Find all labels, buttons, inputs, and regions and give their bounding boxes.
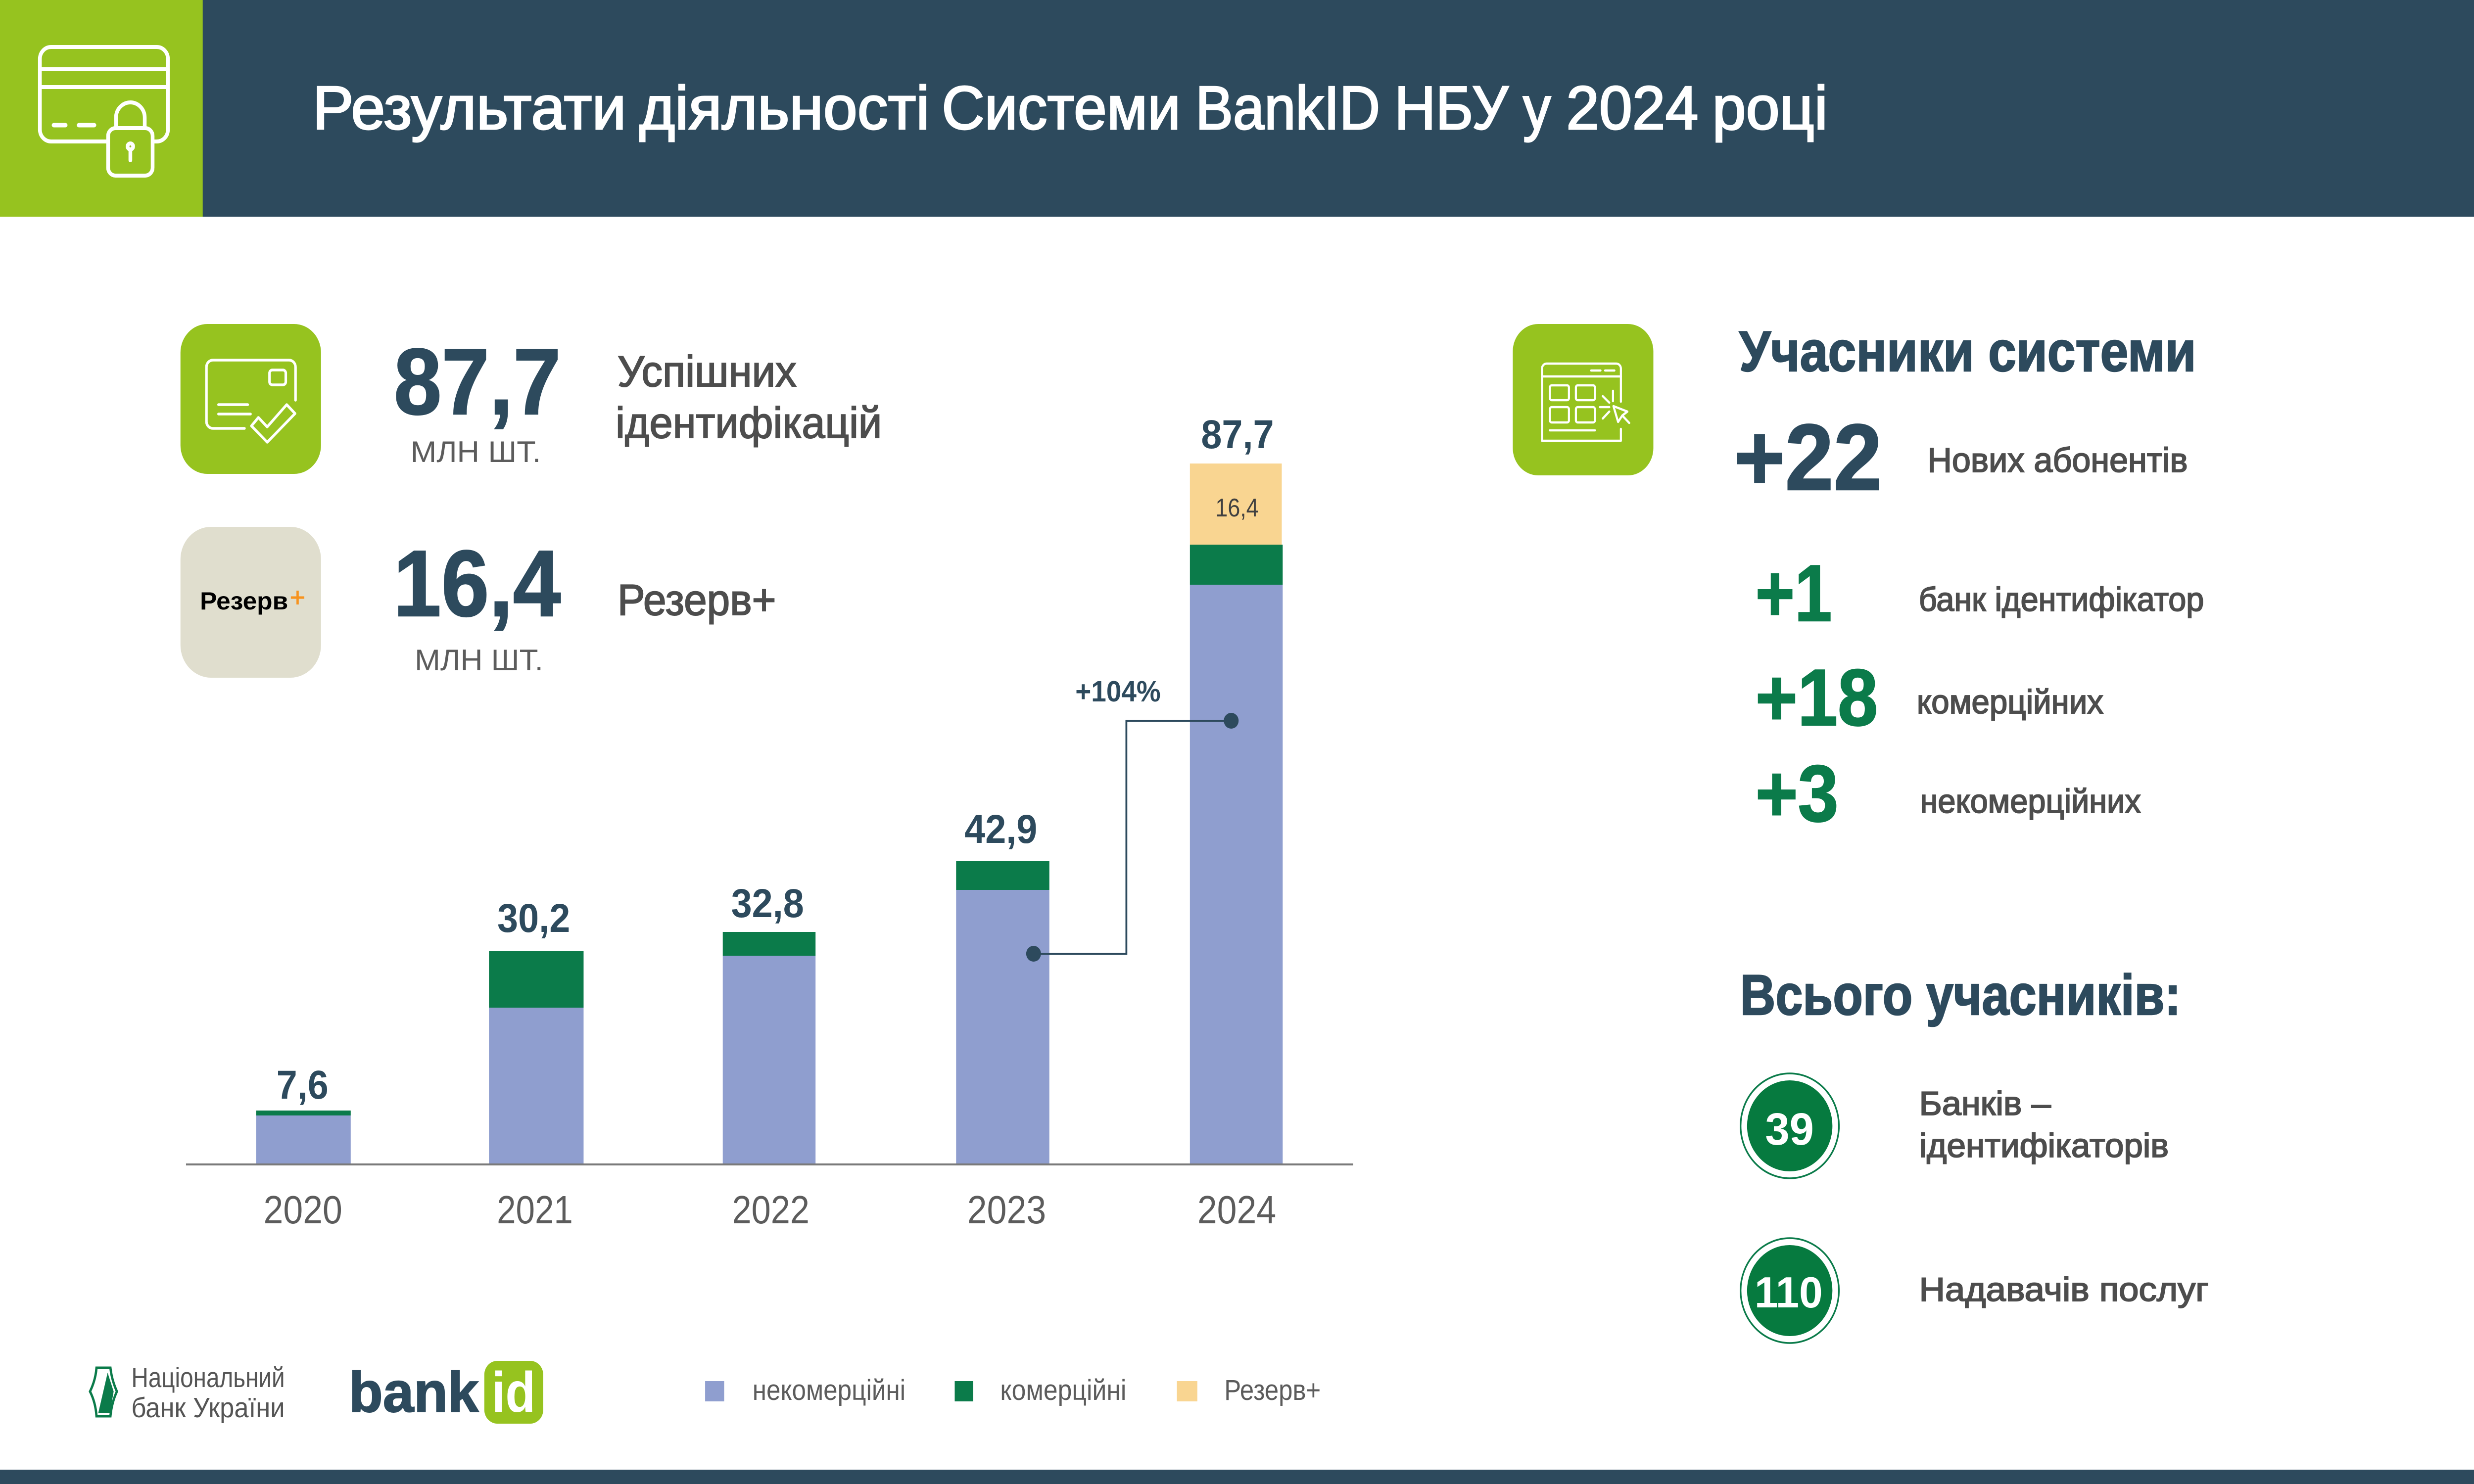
title: Системи [942,74,1181,142]
logo: National Bank of Ukraine: банк України [131,1391,285,1423]
logo: bank id [349,1360,543,1424]
label: identifier bank: банк ідентифікатор [1919,580,2204,618]
panel: system participants [1513,320,2209,1343]
legend: некомерційні [753,1374,905,1406]
bar 2021 [489,895,583,1164]
bar 2024: 16,4 [1215,493,1259,522]
badge: 39 [1741,1073,1839,1178]
title: 2024 [1566,74,1698,142]
bar 2024: 87,7 [1201,412,1274,457]
bar chart [186,412,1353,1232]
footer bar [0,1470,2474,1484]
x axis years: 2020 [264,1188,342,1232]
growth connector arrow [1026,675,1238,962]
title [313,74,1828,142]
label: non-commercial: некомерційних [1920,782,2141,820]
icon: bank card with padlock [40,47,168,176]
bar 2020: 7,6 [277,1062,329,1108]
x axis years: 2024 [1197,1188,1276,1232]
title: Результати [313,74,626,142]
bar 2023: 42,9 [964,806,1037,852]
title: у [1523,74,1551,142]
heading: total participants: Всього учасників: [1740,963,2181,1027]
badge: 39: 39 [1765,1103,1814,1155]
icon: Rezerv+ logo [181,527,321,678]
bar 2023 [956,806,1049,1164]
bar 2020 [256,1062,351,1164]
figure: +1: +1 [1756,549,1832,638]
logo: National Bank of Ukraine: Національний [131,1361,285,1393]
title: НБУ [1394,74,1509,142]
title: діяльності [639,74,930,142]
icon: card with check mark [181,324,321,474]
label: Rezerv+: Резерв+ [618,576,776,625]
x axis years: 2023 [967,1188,1046,1232]
label: commercial: комерційних [1917,683,2103,720]
bar 2022 [723,881,815,1164]
logo: bank id: bank [349,1360,479,1424]
label: identifier banks: ідентифікаторів [1919,1126,2169,1164]
bar 2024 [1190,412,1283,1164]
heading: participants: Учасники системи [1739,320,2196,383]
panel: key figures [181,324,882,678]
label: identifier banks [1919,1084,2169,1164]
header bar [0,0,2474,217]
bar 2022: 32,8 [731,881,804,926]
unit: million pieces: МЛН ШТ. [411,435,541,468]
icon: browser window with cursor [1513,324,1653,475]
growth connector arrow: +104% [1075,675,1161,708]
title: році [1713,74,1828,142]
badge: 110: 110 [1755,1269,1823,1317]
unit: million pieces: МЛН ШТ. [415,644,543,677]
figure: +3: +3 [1756,749,1839,838]
badge: 110 [1741,1238,1839,1343]
label: new subscribers: Нових абонентів [1928,441,2188,479]
figure: 16,4: 16,4 [393,531,561,636]
label: identifier banks: Банків – [1919,1084,2051,1122]
legend [705,1374,1321,1406]
figure: 87,7 identifications: 87,7 [394,329,561,434]
logo: National Bank of Ukraine [90,1361,285,1423]
legend: комерційні [1000,1374,1126,1406]
x axis years [264,1188,1276,1232]
label line 2: ідентифікацій [616,399,882,448]
x axis years: 2022 [732,1188,809,1232]
figure: +22: +22 [1734,405,1882,510]
logo: bank id: id [492,1360,535,1424]
figure: +18: +18 [1756,653,1878,742]
label: successful identifications: Успішних [618,348,797,396]
x axis years: 2021 [497,1188,573,1232]
title: BankID [1195,74,1380,142]
bar 2021: 30,2 [497,895,570,941]
label: service providers: Надавачів послуг [1919,1270,2209,1308]
legend: Резерв+ [1224,1374,1321,1406]
icon: Rezerv+ logo: Резерв [200,588,288,615]
